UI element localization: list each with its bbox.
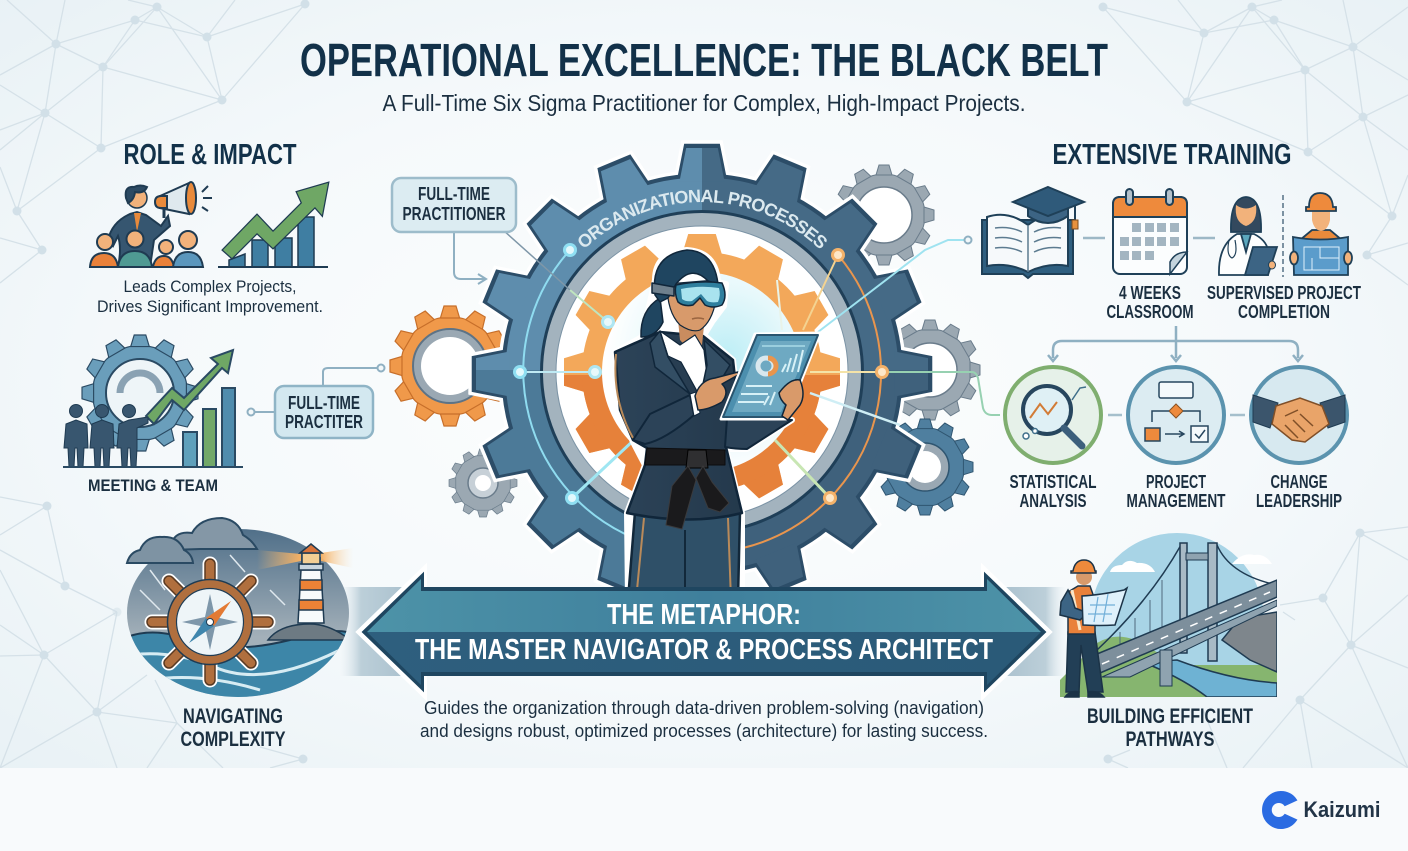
callout: full-time practitioner: FULL-TIME [418,184,490,204]
text: project management: PROJECT [1146,472,1206,492]
gear: gray right [880,320,980,420]
label: building efficient pathways [1087,705,1253,751]
label: navigating complexity: COMPLEXITY [180,728,286,751]
circuit lines and nodes [513,236,1000,548]
text: 4 weeks classroom: CLASSROOM [1106,302,1194,322]
gear: gray small lower left [449,449,517,517]
neck [678,320,704,348]
trousers [628,512,740,600]
text: leads complex projects: Leads Complex Projects, [124,277,296,296]
text: statistical analysis [1010,472,1096,511]
belt [645,448,729,529]
callout: full-time practiter: FULL-TIME [288,393,360,413]
text: change leadership [1256,472,1342,511]
text: project management [1126,472,1226,511]
tablet [721,333,820,419]
worker with blueprint [1060,560,1127,697]
icon: change leadership handshake circle [1251,367,1347,463]
gear: blue lower right [877,419,973,515]
icon: statistical analysis circle [1005,367,1101,463]
logo mark [1263,792,1296,828]
label: building efficient pathways: BUILDING EFFICIENT [1087,705,1253,728]
label: building efficient pathways: PATHWAYS [1126,728,1214,751]
banner heading: THE METAPHOR: [607,599,801,631]
callout: full-time practitioner: PRACTITIONER [402,204,506,224]
heading: extensive training: EXTENSIVE TRAINING [1052,139,1292,171]
panel: role and impact [63,139,384,495]
text: leads complex projects [97,277,323,316]
text: 4 weeks classroom: 4 WEEKS [1119,283,1181,303]
heading: role and impact: ROLE & IMPACT [124,139,297,171]
gear: gray top right [834,165,934,265]
illustration: building efficient pathways [1060,533,1277,751]
hand on tablet [779,380,803,420]
icon: book and graduation cap [982,187,1084,278]
inner orange gear [564,234,840,510]
icon: project management circle [1128,367,1224,463]
ship wheel with compass [147,559,273,685]
text: statistical analysis: ANALYSIS [1020,491,1086,511]
text: metaphor description [420,698,988,741]
divider: dashed [1282,195,1284,277]
icon: engineer with blueprint [1290,193,1352,275]
banner arrow: the metaphor [361,572,1047,692]
sleeve holding tablet [725,418,792,449]
gear: orange left [390,306,510,426]
text: 4 weeks classroom [1106,283,1194,322]
text: supervised project completion [1207,283,1361,322]
illustration: navigating complexity [120,518,360,751]
logo wordmark: Kaizumi [1304,797,1380,822]
label: navigating complexity [180,705,286,751]
callout: full-time practiter [248,364,384,438]
text: metaphor description: and designs robust, optimized processes (architecture) for lasting success. [420,721,988,741]
text: meeting and team: MEETING & TEAM [88,476,218,495]
hair [654,250,718,302]
text: supervised project completion: SUPERVISED PROJECT [1207,283,1361,303]
goggles [652,282,725,307]
curved label: organizational processes: ORGANIZATIONAL PROCESSES [578,190,827,248]
title: OPERATIONAL EXCELLENCE: THE BLACK BELT [300,34,1108,86]
text: project management: MANAGEMENT [1126,491,1226,511]
icon: rising growth chart [218,183,328,267]
clouds [127,518,257,563]
arrows: branching tree [1048,326,1303,415]
icon: leader with megaphone and team [90,182,212,267]
label: navigating complexity: NAVIGATING [183,705,283,728]
forearm pointing at tablet [633,395,694,444]
callout: full-time practitioner [392,178,570,290]
landscape and bridge [1060,533,1277,697]
panel: extensive training [982,139,1361,511]
callout: full-time practiter: PRACTITER [285,412,363,432]
subtitle: A Full-Time Six Sigma Practitioner for Complex, High-Impact Projects. [382,90,1026,116]
side bands behind arrow [340,587,1066,676]
icon: calendar [1113,189,1187,274]
face [667,280,716,331]
stormy sky and sea [127,529,349,697]
text: leads complex projects: Drives Significant Improvement. [97,297,323,316]
lighthouse [257,544,353,623]
icon: team with gear and growth bars [63,335,243,467]
ponytail [641,298,663,337]
jacket [615,332,742,520]
text: metaphor description: Guides the organization through data-driven problem-solving (navigation) [424,698,984,718]
footer strip [0,768,1408,851]
logo: Kaizumi [1263,792,1380,828]
shirt and lapels [660,331,707,393]
small background gears [390,165,980,517]
white outline halo [615,250,792,600]
text: supervised project completion: COMPLETION [1238,302,1330,322]
figure: black belt practitioner with tablet [615,250,820,600]
main gear: organizational processes [468,140,1000,587]
banner subheading: THE MASTER NAVIGATOR & PROCESS ARCHITECT [415,634,993,666]
text: change leadership: CHANGE [1270,472,1328,492]
text: statistical analysis: STATISTICAL [1010,472,1096,492]
icon: supervisor with clipboard [1219,197,1277,275]
text: change leadership: LEADERSHIP [1256,491,1342,511]
